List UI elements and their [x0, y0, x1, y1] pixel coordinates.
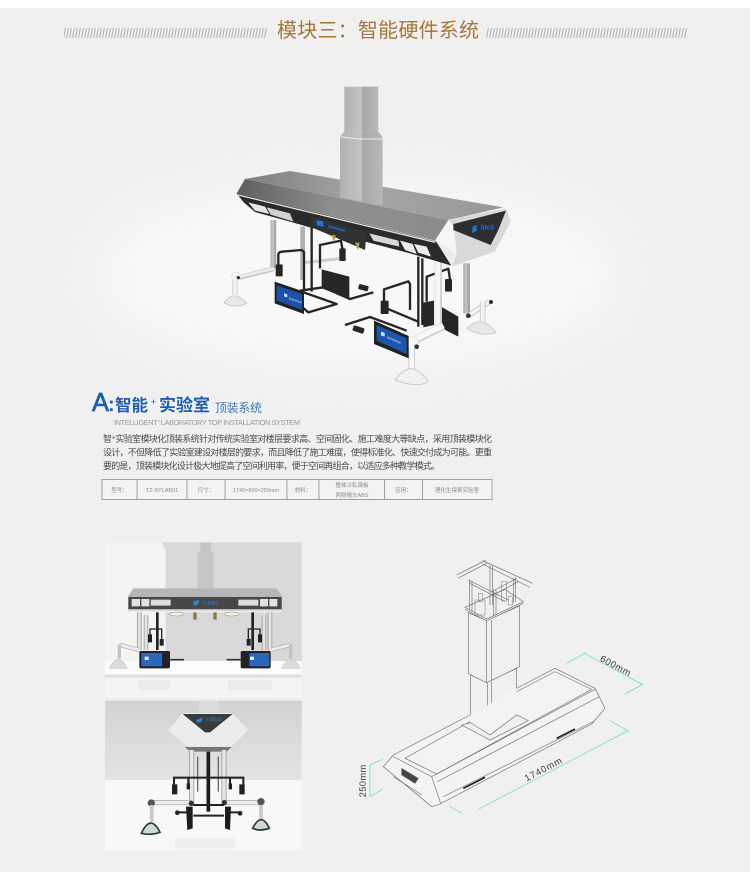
specification table: 1740×600×250mm [233, 488, 280, 494]
tablet right: Windows [386, 336, 402, 345]
black cable frames [278, 227, 450, 331]
title with striped rules: 模块三：智能硬件系统 [277, 19, 479, 42]
tablet left [275, 282, 304, 314]
english subtitle: INTELLIGENT⁺LABORATORY TOP INSTALLATION SYSTEM [114, 418, 300, 427]
heading A: 智能+实验室 顶装系统: 实验室 [159, 395, 210, 415]
heading A: 智能+实验室 顶装系统: A [92, 387, 110, 417]
technical line drawing with dimensions [358, 560, 643, 813]
heading A: 智能+实验室 顶装系统: 顶装系统 [215, 401, 262, 415]
specification table [102, 480, 492, 500]
dimension labels: 250mm [358, 764, 368, 797]
description paragraph [103, 433, 492, 471]
back feet [224, 272, 496, 334]
mounting plate and frame [457, 560, 533, 621]
main product render: ceiling lab system [224, 87, 511, 385]
photo: front view: 天津亚成 [203, 600, 219, 606]
control panels on hood [248, 202, 431, 257]
main product render: ceiling lab system: SfcS [481, 225, 494, 231]
specification table: TZ-SYLAB01 [146, 488, 178, 494]
photo: front view [105, 542, 302, 698]
hood [128, 588, 282, 611]
column [198, 542, 214, 588]
description paragraph: 要的是，顶装模块化设计极大地提高了空间利用率，便于空间再组合，以适应多种教学模式。 [103, 460, 440, 471]
beam [383, 668, 605, 807]
title with striped rules [64, 19, 687, 42]
black sockets and boxes [276, 248, 458, 337]
hood top [245, 171, 503, 220]
tablets edge-on [186, 807, 231, 830]
specification table: 尺寸： [198, 486, 214, 494]
legs [192, 750, 224, 802]
hood front face [237, 179, 449, 241]
description paragraph: 智⁺实验室模块化顶装系统针对传统实验室对楼层要求高、空间固化、施工难度大等缺点，采用顶装模块化 [103, 433, 492, 444]
legs [139, 612, 270, 650]
column [468, 606, 519, 735]
specification table: 整体冷轧钢板 [335, 481, 369, 489]
back legs and arms [235, 220, 489, 323]
dimension lines [370, 653, 643, 813]
heading A: 智能+实验室 顶装系统: 智能 [115, 395, 148, 415]
tablets [139, 651, 170, 668]
specification table: 型号： [111, 486, 128, 494]
hood end [168, 713, 249, 747]
specification table: 理化生探索实验室 [435, 486, 479, 494]
specification table: 两侧墙头ABS [335, 491, 369, 499]
tablet left: Windows [288, 296, 303, 305]
heading A: 智能+实验室 顶装系统: : [108, 394, 115, 416]
end cap [435, 209, 511, 267]
tablet right [374, 321, 409, 358]
heading A: 智能+实验室 顶装系统 [92, 387, 262, 417]
heading A: 智能+实验室 顶装系统: + [151, 397, 156, 407]
dimension labels [358, 654, 633, 797]
description paragraph: 设计，不但降低了实验室建设对楼层的要求，而且降低了施工难度，使得标准化、快速交付成为可能。更重 [103, 446, 492, 458]
dimension labels: 1740mm [523, 755, 564, 783]
column [340, 87, 383, 205]
photo: side view: 天津亚成 [205, 716, 221, 722]
specification table: 应用： [395, 486, 412, 494]
hood underside [237, 193, 453, 266]
dimension labels: 600mm [598, 654, 633, 678]
specification table: 材料： [295, 486, 311, 494]
front leg and arm [395, 262, 443, 385]
photo: side view [105, 701, 302, 850]
